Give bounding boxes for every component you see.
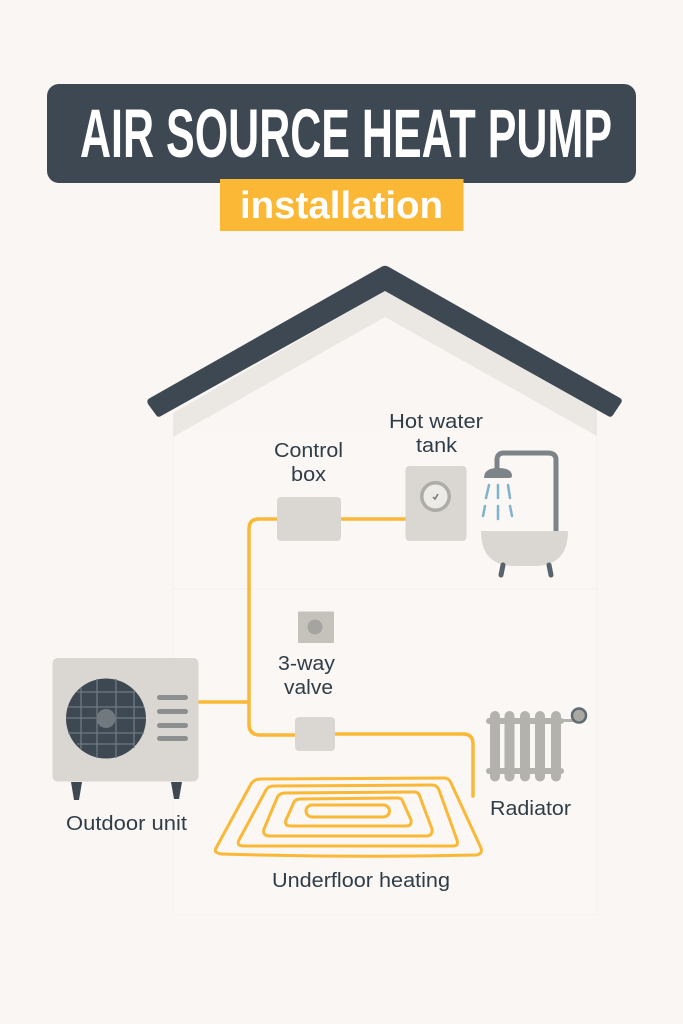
label: 3-way valve: valve	[284, 677, 333, 699]
shower and bath	[481, 453, 568, 575]
underfloor heating coil	[215, 778, 481, 856]
3-way valve icon	[298, 612, 334, 643]
shower pipe	[497, 453, 556, 532]
icon: fan grille	[66, 678, 146, 758]
radiator	[486, 708, 586, 782]
roof	[147, 266, 622, 417]
house outline	[173, 291, 597, 915]
hot water tank	[406, 466, 466, 541]
control box	[277, 497, 341, 541]
label: control box: Control	[274, 440, 343, 462]
label: radiator: Radiator	[490, 798, 571, 820]
outdoor unit	[52, 658, 198, 800]
label: hot water tank: tank	[416, 435, 458, 457]
vent slots	[157, 695, 188, 741]
unit feet	[71, 782, 182, 800]
label: control box	[274, 440, 343, 486]
label: 3-way valve: 3-way	[278, 653, 335, 675]
title banner	[47, 84, 636, 183]
icon: gauge	[420, 481, 451, 512]
water drops	[483, 485, 512, 519]
label: outdoor unit: Outdoor unit	[66, 813, 187, 835]
pipework	[199, 519, 473, 796]
subtitle: installation	[220, 179, 464, 231]
bath feet	[501, 565, 551, 575]
label: control box: box	[291, 464, 326, 486]
label: 3-way valve	[278, 653, 335, 699]
bathtub	[481, 531, 568, 566]
valve box	[295, 717, 335, 751]
shower head	[484, 468, 512, 478]
radiator valve	[572, 708, 586, 722]
label: underfloor heating: Underfloor heating	[272, 870, 450, 892]
subtitle: installation: installation	[240, 185, 443, 227]
label: hot water tank	[389, 411, 483, 457]
label: hot water tank: Hot water	[389, 411, 483, 433]
